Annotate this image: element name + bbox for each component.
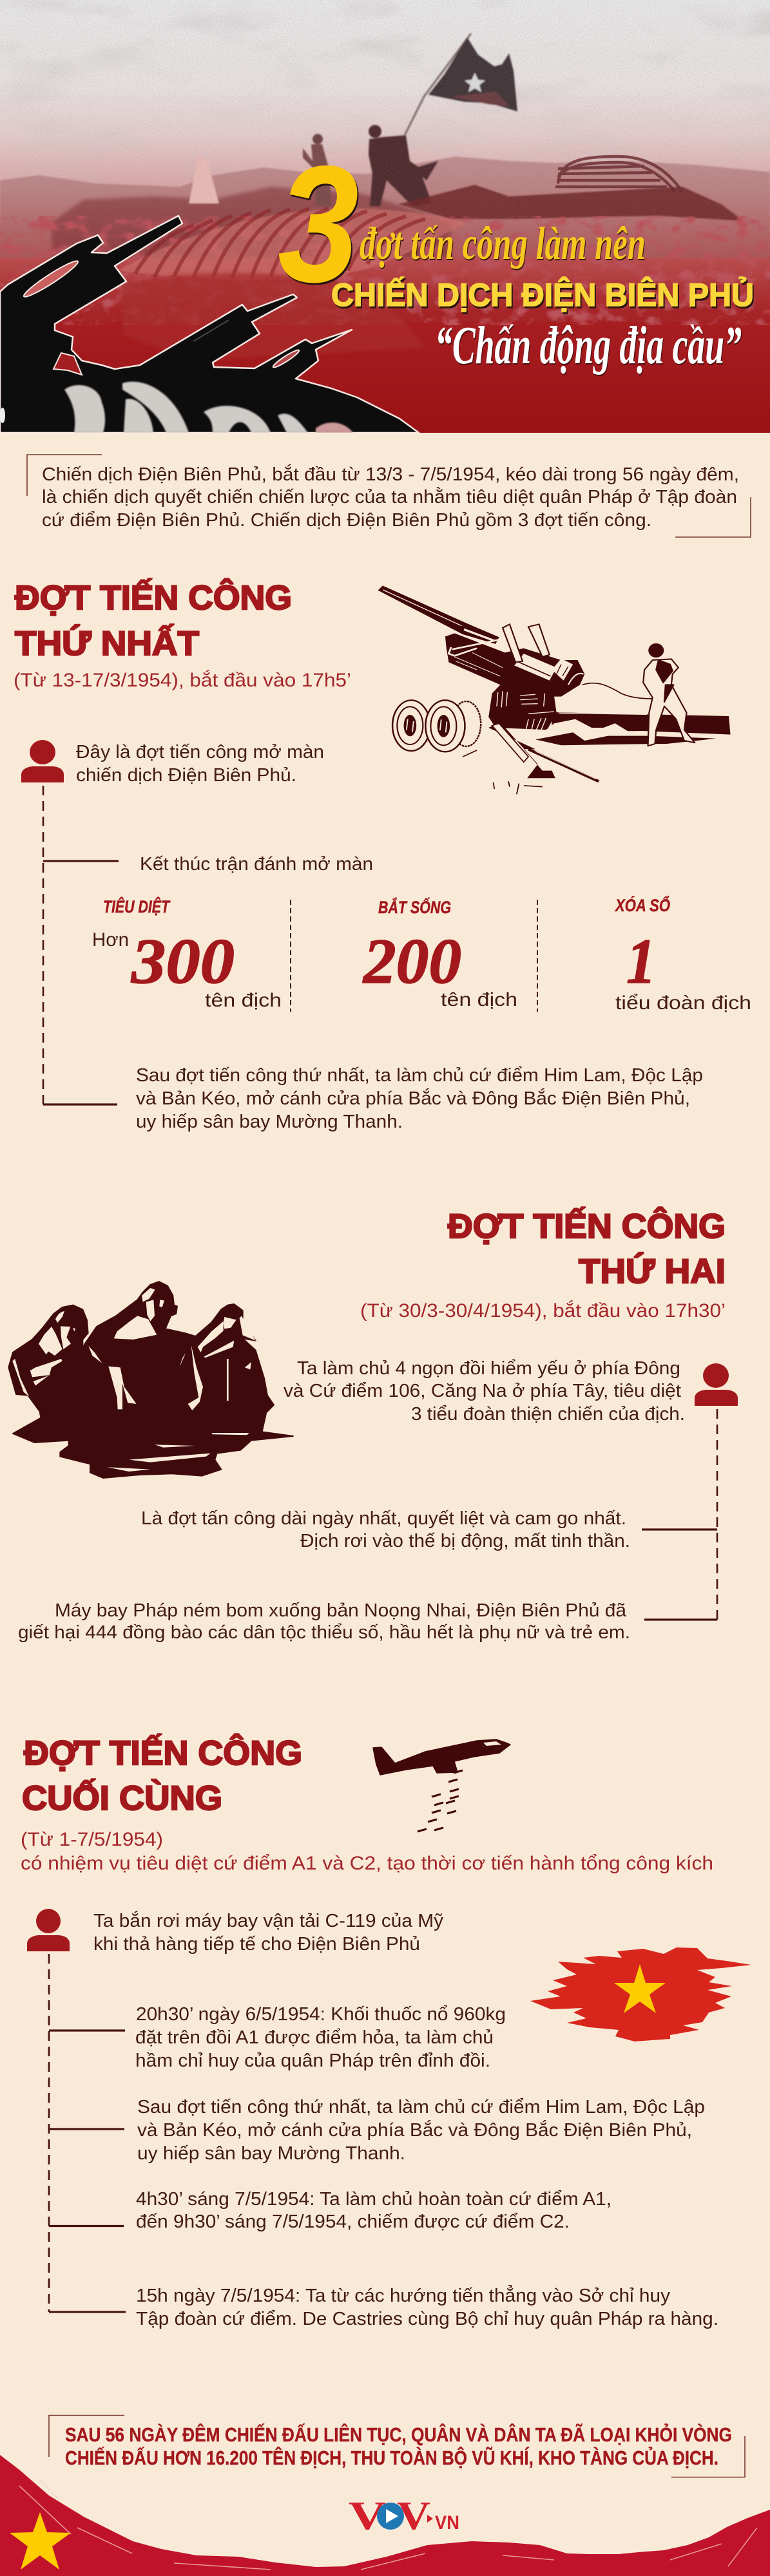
sub: barrel	[378, 585, 499, 644]
title: campaign name: CHIẾN DỊCH ĐIỆN BIÊN PHỦ	[331, 276, 754, 313]
sub: falling bombs	[418, 1770, 463, 1832]
text: C-119: khi thả hàng tiếp tế cho Điện Biên Phủ	[93, 1934, 420, 1955]
stat: captured: 200	[362, 925, 461, 997]
stat: captured	[362, 897, 517, 1010]
photo: soldiers	[303, 125, 438, 206]
text: 4h30	[136, 2189, 611, 2232]
icon: person	[27, 1909, 70, 1951]
text: 15h: 15h ngày 7/5/1954: Ta từ các hướng tiến thẳng vào Sở chỉ huy	[136, 2284, 671, 2306]
heading: second attack: (Từ 30/3-30/4/1954), bắt đầu vào 17h30’	[360, 1300, 726, 1321]
text: hills taken	[284, 1358, 685, 1425]
text: outcome: và Bản Kéo, mở cánh cửa phía Bắc và Đông Bắc Điện Biên Phủ,	[136, 1088, 690, 1109]
text: hills taken: Ta làm chủ 4 ngọn đồi hiểm yếu ở phía Đông	[297, 1358, 680, 1379]
stat: captured: BẮT SỐNG	[378, 897, 451, 917]
sub: mount hatching	[497, 691, 554, 733]
stat: killed: tên địch	[205, 990, 282, 1011]
text: outcome	[136, 1065, 703, 1132]
icon: saluting soldiers	[8, 1282, 293, 1478]
sub: cradle	[445, 633, 584, 730]
icon: painted Vietnamese flag	[530, 1947, 751, 2041]
icon: bomber plane	[373, 1739, 510, 1832]
photo: mottled ground	[0, 216, 770, 325]
timeline: first attack	[21, 740, 751, 1132]
text: 15h: Tập đoàn cứ điểm. De Castries cùng Bộ chỉ huy quân Pháp ra hàng.	[136, 2309, 718, 2329]
hills in the photo	[0, 156, 770, 258]
intro text block	[27, 455, 751, 537]
heading: final attack: (Từ 1-7/5/1954)	[21, 1829, 163, 1850]
heading: final attack: có nhiệm vụ tiêu diệt cứ điểm A1 và C2, tạo thời cơ tiến hành tổng công kích	[21, 1853, 713, 1874]
text: bombing: giết hại 444 đồng bào các dân tộc thiểu số, hầu hết là phụ nữ và trẻ em.	[18, 1622, 630, 1643]
logo: VOV.VN	[349, 2494, 459, 2538]
text: after first attack: uy hiếp sân bay Mường Thanh.	[137, 2143, 405, 2164]
logo: VOV.VN: V	[349, 2494, 386, 2538]
stat: killed: 300	[131, 925, 235, 997]
text: after first attack	[137, 2097, 705, 2164]
stat: wiped out: XÓA SỔ	[614, 895, 670, 915]
text: A1 explosion: 20h30’ ngày 6/5/1954: Khối thuốc nổ 960kg	[136, 2004, 506, 2025]
tent	[189, 155, 219, 204]
silhouette: gun tyres	[64, 382, 353, 433]
heading: final attack	[21, 1733, 713, 1874]
icon: howitzer with gunner	[378, 585, 731, 794]
heading: first attack: (Từ 13-17/3/1954), bắt đầu vào 17h5’	[14, 670, 351, 691]
title: line one: đợt tấn công làm nên	[360, 218, 646, 269]
text: opening: Đây là đợt tiến công mở màn	[76, 742, 324, 762]
text: A1 explosion: hầm chỉ huy của quân Pháp trên đỉnh đồi.	[135, 2050, 490, 2071]
text: longest attack	[141, 1508, 630, 1551]
text: 4h30: 4h30’ sáng 7/5/1954: Ta làm chủ hoàn toàn cứ điểm A1,	[136, 2189, 611, 2210]
logo: VOV.VN: V	[397, 2494, 430, 2538]
stat: killed	[92, 896, 282, 1011]
heading: second attack: ĐỢT TIẾN CÔNG	[448, 1206, 726, 1245]
intro text block: Chiến dịch Điện Biên Phủ, bắt đầu từ 13/3 - 7/5/1954, kéo dài trong 56 ngày đêm,	[42, 464, 739, 485]
text: opening: chiến dịch Điện Biên Phủ.	[76, 765, 296, 786]
text: hills taken: và Cứ điểm 106, Căng Na ở phía Tây, tiêu diệt	[284, 1381, 681, 1401]
photo: ribbed dome	[118, 208, 467, 279]
silhouette: anti-aircraft guns	[0, 216, 419, 433]
photo: raised flag	[405, 33, 517, 135]
panel: hero banner	[0, 0, 770, 433]
text: hills taken: 3 tiểu đoàn thiện chiến của địch.	[411, 1404, 685, 1425]
sub: gunner	[643, 644, 695, 746]
text: outcome: uy hiếp sân bay Mường Thanh.	[136, 1112, 403, 1132]
timeline: second attack	[18, 1358, 738, 1643]
sub: wheels	[392, 700, 481, 752]
text: C-119	[93, 1910, 444, 1955]
text: after first attack: Sau đợt tiến công thứ nhất, ta làm chủ cứ điểm Him Lam, Độc Lập	[137, 2097, 705, 2117]
stat: wiped out: tiểu đoàn địch	[615, 992, 751, 1014]
icon: person	[695, 1363, 738, 1406]
stat: wiped out: 1	[626, 925, 656, 997]
text: opening	[76, 742, 324, 786]
heading: final attack: CUỐI CÙNG	[22, 1779, 222, 1817]
heading: final attack: ĐỢT TIẾN CÔNG	[24, 1733, 302, 1772]
text: C-119: Ta bắn rơi máy bay vận tải C-119 của Mỹ	[93, 1910, 444, 1931]
stat: wiped out	[614, 895, 751, 1014]
title: numeral 3: 3	[278, 131, 359, 317]
heading: second attack: THỨ HAI	[579, 1252, 726, 1291]
text: A1 explosion	[135, 2004, 506, 2071]
timeline: final attack	[27, 1909, 718, 2329]
photo: lower mound	[122, 273, 425, 361]
text: 4h30: đến 9h30’ sáng 7/5/1954, chiếm được cứ điểm C2.	[136, 2211, 570, 2232]
heading: second attack	[360, 1206, 726, 1321]
text: A1 explosion: đặt trên đồi A1 được điểm hỏa, ta làm chủ	[135, 2027, 494, 2048]
film grain	[0, 0, 770, 322]
logo: VOV.VN: VN	[435, 2512, 459, 2533]
text: after first attack: và Bản Kéo, mở cánh cửa phía Bắc và Đông Bắc Điện Biên Phủ,	[137, 2119, 692, 2141]
sub: flag star	[614, 1964, 666, 2013]
text: 15h	[136, 2284, 718, 2329]
text: bombing	[18, 1600, 630, 1643]
heading: first attack: ĐỢT TIẾN CÔNG	[15, 578, 292, 617]
sub: trail bar	[552, 712, 731, 735]
text: longest attack: Là đợt tấn công dài ngày nhất, quyết liệt và cam go nhất.	[141, 1508, 626, 1529]
stat: killed: TIÊU DIỆT	[103, 896, 171, 916]
text: bombing: Máy bay Pháp ném bom xuống bản Noọng Nhai, Điện Biên Phủ đã	[55, 1600, 627, 1621]
icon: person	[21, 740, 64, 782]
text: battle end: Kết thúc trận đánh mở màn	[140, 854, 373, 875]
text: outcome: Sau đợt tiến công thứ nhất, ta làm chủ cứ điểm Him Lam, Độc Lập	[136, 1065, 703, 1086]
stat: killed: Hơn	[92, 929, 129, 951]
photo: wrecked bunker and dome frame	[398, 185, 744, 221]
stat: captured: tên địch	[441, 989, 517, 1010]
heading: first attack	[14, 578, 351, 691]
sub: ground mounds	[538, 719, 650, 745]
heading: first attack: THỨ NHẤT	[15, 624, 199, 663]
sub: brush marks	[19, 2479, 757, 2570]
text: longest attack: Địch rơi vào thế bị động, mất tinh thần.	[300, 1531, 630, 1551]
footer flag	[0, 2455, 770, 2576]
intro text block: là chiến dịch quyết chiến chiến lược của ta nhằm tiêu diệt quân Pháp ở Tập đoàn	[42, 486, 737, 507]
sub: trail and spade	[488, 723, 555, 778]
conclusion callout	[49, 2415, 745, 2477]
intro text block: cứ điểm Điện Biên Phủ. Chiến dịch Điện Biên Phủ gồm 3 đợt tiến công.	[42, 510, 651, 531]
sub: footer star	[10, 2512, 71, 2570]
